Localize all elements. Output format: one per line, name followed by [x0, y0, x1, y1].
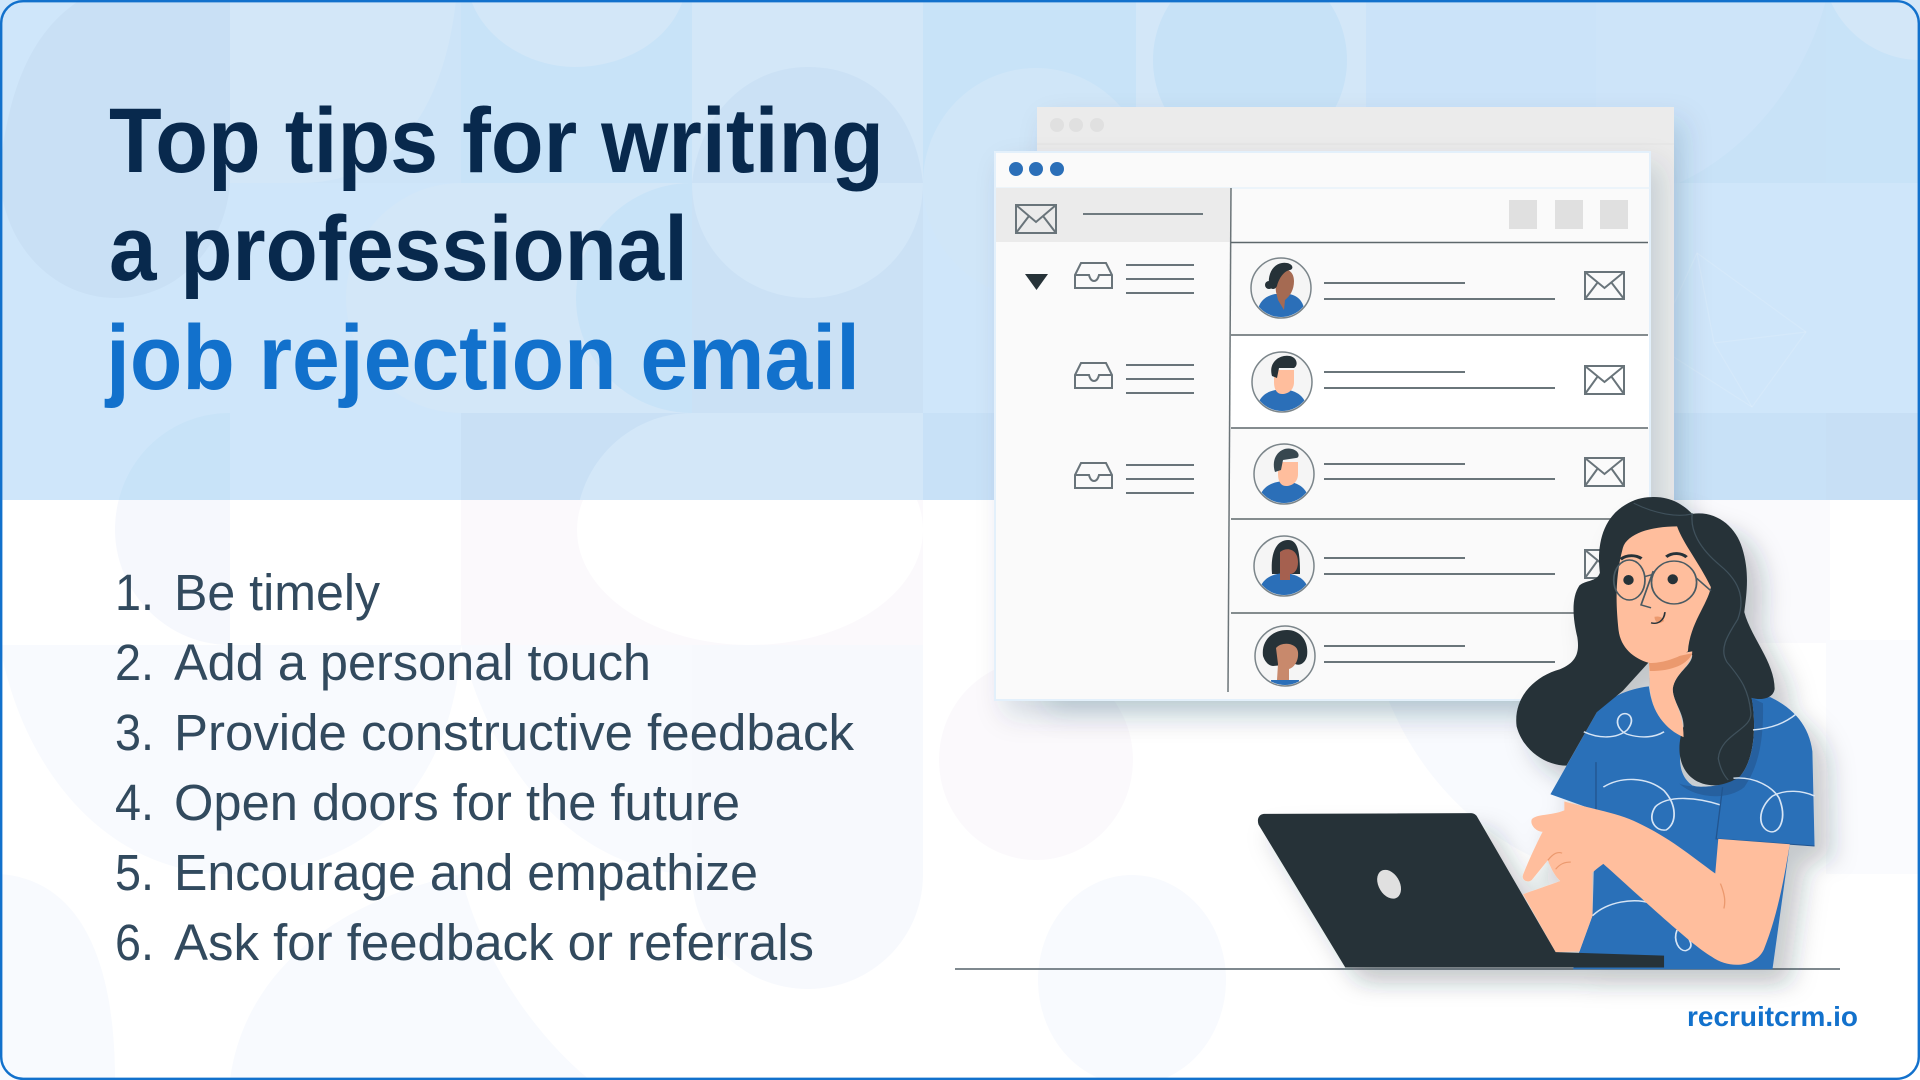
tips list: 4. [115, 774, 154, 831]
tips list: 2. [115, 634, 154, 691]
laptop [1258, 813, 1664, 967]
avatar 5 [1255, 626, 1315, 688]
icon: dropdown triangle [1025, 274, 1048, 290]
shirt shadow under hair [1679, 698, 1763, 796]
back browser window [1037, 107, 1674, 697]
icons: message envelopes [1585, 272, 1624, 578]
background: blue top panel with tile pattern [0, 0, 1920, 530]
brand url: recruitcrm.io [1687, 1001, 1858, 1032]
decorative faint paper plane [1655, 253, 1806, 407]
icon: sidebar envelope [1016, 205, 1056, 233]
tips list: 3. [115, 704, 154, 761]
tips list: Encourage and empathize [174, 844, 758, 901]
illustration: woman at laptop [1258, 497, 1815, 969]
tips list [115, 564, 854, 971]
message text lines [1324, 283, 1555, 662]
shirt [1550, 686, 1815, 969]
shirt pattern [1584, 714, 1815, 951]
sidebar header [996, 188, 1231, 242]
title: Top tips for writing [109, 90, 884, 192]
hand creases [1548, 853, 1725, 909]
avatar 3 [1254, 444, 1314, 504]
avatar 1 [1251, 258, 1311, 318]
avatar 2 [1252, 352, 1312, 412]
tips list: 1. [115, 564, 154, 621]
title: job rejection email [104, 307, 860, 409]
tips list: Be timely [174, 564, 380, 621]
tips list: Provide constructive feedback [174, 704, 854, 761]
toolbar buttons [1509, 200, 1628, 229]
hair strands [1634, 503, 1751, 780]
neck shadow [1649, 653, 1692, 671]
tips list: 5. [115, 844, 154, 901]
left forearm [1523, 869, 1592, 952]
tips list: Open doors for the future [174, 774, 740, 831]
ground line [955, 968, 1840, 970]
face [1617, 526, 1711, 663]
sidebar header line [1083, 213, 1203, 215]
sidebar folder items [1075, 263, 1194, 493]
laptop logo [1373, 867, 1406, 901]
neck [1649, 651, 1692, 737]
title [104, 90, 884, 409]
front mail window [995, 152, 1650, 700]
avatar 4 [1254, 536, 1314, 596]
selected row background [1231, 335, 1649, 428]
hair [1516, 497, 1775, 785]
tips list: 6. [115, 914, 154, 971]
tips list: Ask for feedback or referrals [174, 914, 814, 971]
window controls [1009, 162, 1064, 176]
title: a professional [109, 198, 688, 300]
row dividers [1231, 242, 1648, 613]
background: pale lower panel pattern [115, 500, 230, 644]
pointing arm and hand [1523, 801, 1790, 965]
facial features [1614, 554, 1711, 623]
sidebar divider [1228, 188, 1231, 692]
shirt seams [1596, 762, 1815, 846]
tips list: Add a personal touch [174, 634, 651, 691]
